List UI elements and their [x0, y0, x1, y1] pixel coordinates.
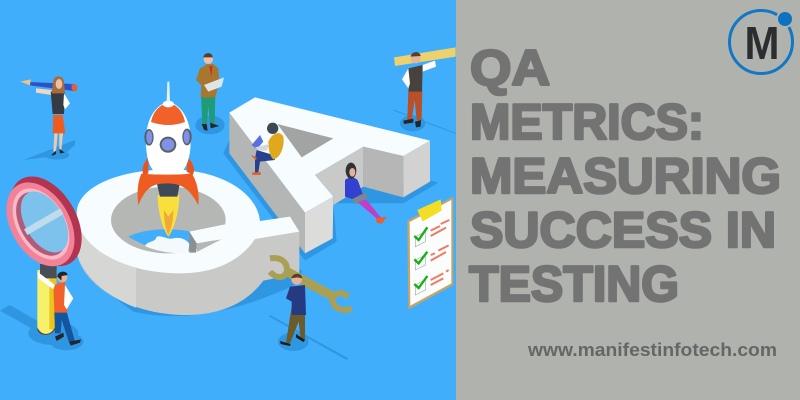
- figure: man with tablet: [195, 53, 225, 134]
- icon: company logo: M: [744, 17, 780, 69]
- text: website url: www.manifestinfotech.com: [527, 340, 777, 360]
- illustration: letter A: [223, 97, 438, 261]
- icon: magnifying glass: [0, 164, 97, 345]
- illustration: letter Q with rocket: [74, 82, 302, 316]
- figure: woman carrying pencil: [20, 76, 77, 160]
- heading: title text: SUCCESS IN: [470, 202, 776, 258]
- figure: man with wrench: [269, 258, 352, 360]
- icon: clipboard checklist: [407, 197, 453, 309]
- panel: blue illustration background: [0, 0, 456, 400]
- icon: company logo: [730, 10, 794, 74]
- heading: title text: MEASURING: [470, 148, 781, 204]
- heading: title text: TESTING: [469, 256, 679, 312]
- figure: man in orange holding magnifier: [37, 272, 83, 350]
- illustration: people and magnifier on the left: [0, 53, 225, 350]
- heading: title text: QA: [470, 40, 550, 96]
- figure: woman sitting with laptop: [345, 163, 387, 224]
- icon: rocket: [138, 82, 199, 237]
- heading: title text: METRICS:: [470, 94, 704, 150]
- illustration: people and clipboard on the right: [251, 47, 456, 360]
- heading: title text: [469, 40, 781, 312]
- figure: man carrying ruler: [393, 47, 456, 133]
- figure: man seated on A with laptop: [251, 123, 284, 175]
- panel: grey title background: [456, 0, 800, 400]
